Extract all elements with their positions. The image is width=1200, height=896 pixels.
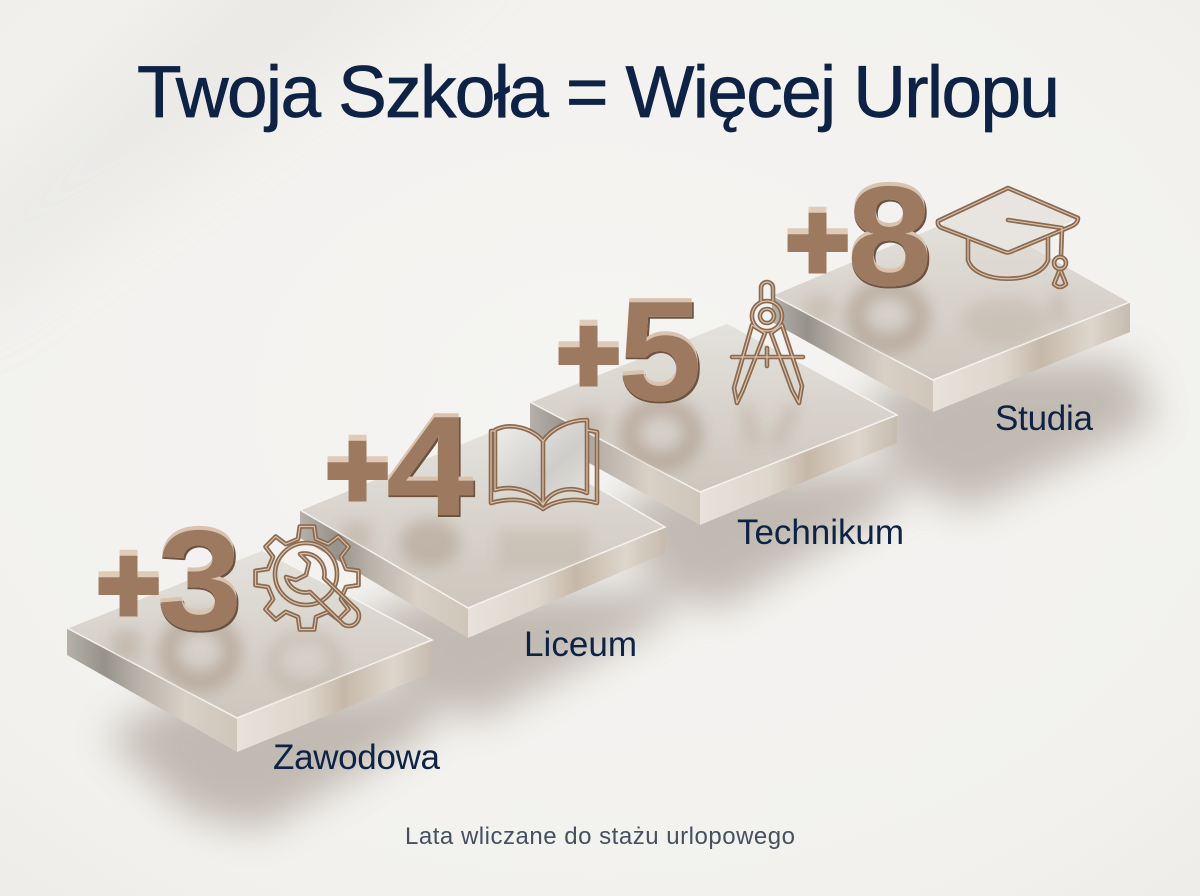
label: Technikum: Technikum [737,513,904,552]
title: Twoja Szkoła = Więcej Urlopu [137,52,1060,133]
caption: Lata wliczane do stażu urlopowego [405,823,795,850]
number: +3 [97,501,242,660]
label: Studia: Studia [995,399,1094,438]
slab: Studia [772,212,1130,412]
cast shadows under slabs [105,360,1155,830]
number: +8 [786,157,932,316]
number: +4: 4 [386,387,474,546]
icon: open book [491,420,597,509]
number: +8: + [786,181,849,302]
number: +5 [557,272,702,431]
icon: graduation cap [938,188,1078,287]
icon: gear with wrench [256,526,359,630]
number: +4 [326,387,474,546]
slab: Zawodowa [67,550,432,752]
label: Liceum: Liceum [524,625,637,664]
icon: drawing compass [732,282,803,403]
number: +4: + [326,409,389,530]
slab: Technikum [530,323,897,525]
label: Zawodowa: Zawodowa [273,738,441,777]
slab: Liceum [300,429,665,638]
number: +3: + [97,524,160,645]
number: +5: + [557,294,620,415]
number: +5: 5 [618,272,702,431]
number: +3: 3 [157,501,242,660]
number: +8: 8 [847,157,932,316]
